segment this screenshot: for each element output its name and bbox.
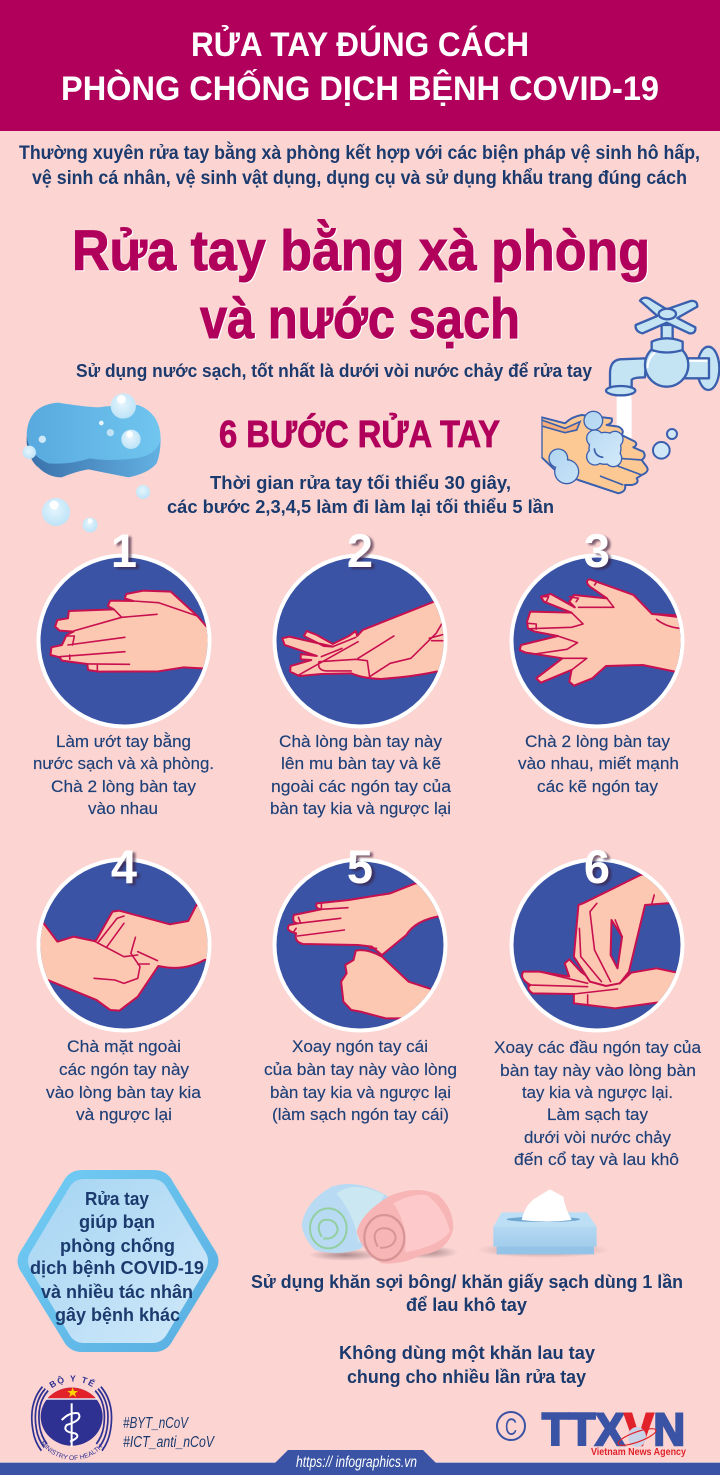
- towel warning: [339, 1342, 596, 1387]
- step 3 caption: Chà 2 lòng bàn tay: [525, 732, 671, 751]
- callout hexagon: gây bệnh khác: [55, 1304, 180, 1325]
- intro text: vệ sinh cá nhân, vệ sinh vật dụng, dụng cụ và sử dụng khẩu trang đúng cách: [32, 168, 687, 189]
- logo: Ministry of Health: BỘ Y TẾ: [49, 1376, 96, 1388]
- step 2 caption: bàn tay kia và ngược lại: [270, 799, 451, 818]
- step 1 caption: nước sạch và xà phòng.: [33, 754, 214, 773]
- step 6: [494, 840, 702, 1169]
- callout hexagon: Rửa tay: [85, 1188, 150, 1209]
- step 3: [510, 524, 689, 796]
- title banner: PHÒNG CHỐNG DỊCH BỆNH COVID-19: [61, 69, 659, 108]
- step 1: [33, 524, 216, 818]
- step 2 caption: lên mu bàn tay và kẽ: [281, 754, 441, 773]
- logo: TTXVN: TTXVN: [542, 1404, 685, 1455]
- step 6 caption: bàn tay này vào lòng bàn: [500, 1061, 696, 1080]
- drying advice: Sử dụng khăn sợi bông/ khăn giấy sạch dùng 1 lần: [251, 1271, 683, 1292]
- step 2: [270, 524, 455, 818]
- step 3 circle illustration: [510, 554, 689, 728]
- hashtags: [123, 1415, 215, 1451]
- step 2 circle illustration: [272, 554, 455, 728]
- step 1 caption: Làm ướt tay bằng: [56, 732, 191, 751]
- towel warning: chung cho nhiều lần rửa tay: [347, 1366, 587, 1387]
- icon: rolled towels: [302, 1184, 458, 1264]
- time note: Thời gian rửa tay tối thiểu 30 giây,: [210, 472, 511, 493]
- step 4 circle illustration: [32, 858, 220, 1032]
- callout hexagon: dịch bệnh COVID-19: [30, 1257, 204, 1278]
- heading: 6 steps: 6 BƯỚC RỬA TAY: [219, 412, 500, 456]
- callout hexagon: giúp bạn: [79, 1211, 155, 1232]
- step 1 caption: [33, 732, 214, 818]
- step 4 caption: [46, 1037, 202, 1124]
- callout hexagon: và nhiều tác nhân: [41, 1281, 193, 1302]
- icon: tissue box: [477, 1189, 610, 1258]
- step 4 caption: Chà mặt ngoài: [67, 1037, 181, 1056]
- step 5: [264, 840, 457, 1124]
- logo: Ministry of Health: MINISTRY OF HEALTH: [42, 1440, 102, 1460]
- step 5 number: 5: [347, 840, 373, 893]
- step 6 caption: tay kia và ngược lại.: [522, 1083, 673, 1102]
- icon: washing hands with foam: [538, 400, 677, 493]
- step 3 caption: [518, 732, 679, 796]
- step 2 caption: ngoài các ngón tay của: [271, 777, 452, 796]
- step 5 caption: bàn tay kia và ngược lại: [270, 1083, 451, 1102]
- hashtags: #BYT_nCoV: [123, 1415, 189, 1432]
- loose bubbles: [42, 485, 150, 532]
- soap bar: [23, 393, 161, 477]
- copyright symbol: C: [505, 1414, 517, 1441]
- main heading: [72, 218, 650, 351]
- step 1 caption: Chà 2 lòng bàn tay: [51, 777, 197, 796]
- step 6 caption: [494, 1038, 702, 1169]
- step 5 caption: [264, 1037, 457, 1124]
- step 6 circle illustration: [510, 858, 689, 1032]
- main heading: và nước sạch: [200, 287, 520, 351]
- step 5 caption: (làm sạch ngón tay cái): [272, 1105, 449, 1124]
- step 1 number: 1: [111, 524, 137, 577]
- step 3 caption: vào nhau, miết mạnh: [518, 754, 679, 773]
- step 2 caption: Chà lòng bàn tay này: [279, 732, 443, 751]
- step 6 caption: dưới vòi nước chảy: [524, 1128, 671, 1147]
- hashtags: #ICT_anti_nCoV: [123, 1434, 215, 1451]
- step 4 caption: các ngón tay này: [59, 1060, 190, 1079]
- icon: faucet and water: [606, 298, 719, 448]
- step 6 caption: đến cổ tay và lau khô: [514, 1150, 679, 1169]
- step 1 caption: vào nhau: [88, 799, 158, 818]
- step 6 caption: Làm sạch tay: [547, 1105, 648, 1124]
- step 4: [36, 850, 212, 1124]
- callout hexagon: phòng chống: [60, 1235, 175, 1256]
- footer bar: [0, 1450, 720, 1475]
- blue towel: [302, 1184, 388, 1253]
- drying advice: để lau khô tay: [406, 1294, 528, 1315]
- logo: Ministry of Health: [30, 1376, 112, 1460]
- step 2 caption: [270, 732, 452, 818]
- copyright symbol: [497, 1412, 525, 1441]
- step 6 number: 6: [584, 840, 610, 893]
- pink towel: [357, 1190, 453, 1264]
- step 1 circle illustration: [36, 554, 216, 728]
- drying advice: [251, 1271, 683, 1315]
- icon: soap with bubbles: [23, 393, 161, 532]
- logo: TTXVN: Vietnam News Agency: [591, 1446, 686, 1458]
- subheading: clean water: Sử dụng nước sạch, tốt nhất là dưới vòi nước chảy để rửa tay: [76, 360, 593, 381]
- time note: các bước 2,3,4,5 làm đi làm lại tối thiểu 5 lần: [167, 496, 554, 517]
- towel warning: Không dùng một khăn lau tay: [339, 1342, 596, 1363]
- intro text: [19, 142, 700, 189]
- step 5 circle illustration: [272, 858, 455, 1032]
- step 6 caption: Xoay các đầu ngón tay của: [494, 1038, 702, 1057]
- main heading: Rửa tay bằng xà phòng: [72, 218, 650, 283]
- step 4 caption: và ngược lại: [76, 1105, 172, 1124]
- title banner: [0, 0, 720, 131]
- step 3 caption: các kẽ ngón tay: [537, 777, 659, 796]
- title banner: RỬA TAY ĐÚNG CÁCH: [191, 26, 529, 64]
- step 4 number: 4: [111, 840, 137, 893]
- step 3 number: 3: [584, 524, 610, 577]
- step 5 caption: của bàn tay này vào lòng: [264, 1060, 457, 1079]
- time note: [167, 472, 554, 517]
- step 2 number: 2: [347, 524, 373, 577]
- callout hexagon: [18, 1170, 218, 1352]
- step 5 caption: Xoay ngón tay cái: [292, 1037, 428, 1056]
- step 4 caption: vào lòng bàn tay kia: [46, 1083, 202, 1102]
- footer bar: https:// infographics.vn: [296, 1454, 417, 1471]
